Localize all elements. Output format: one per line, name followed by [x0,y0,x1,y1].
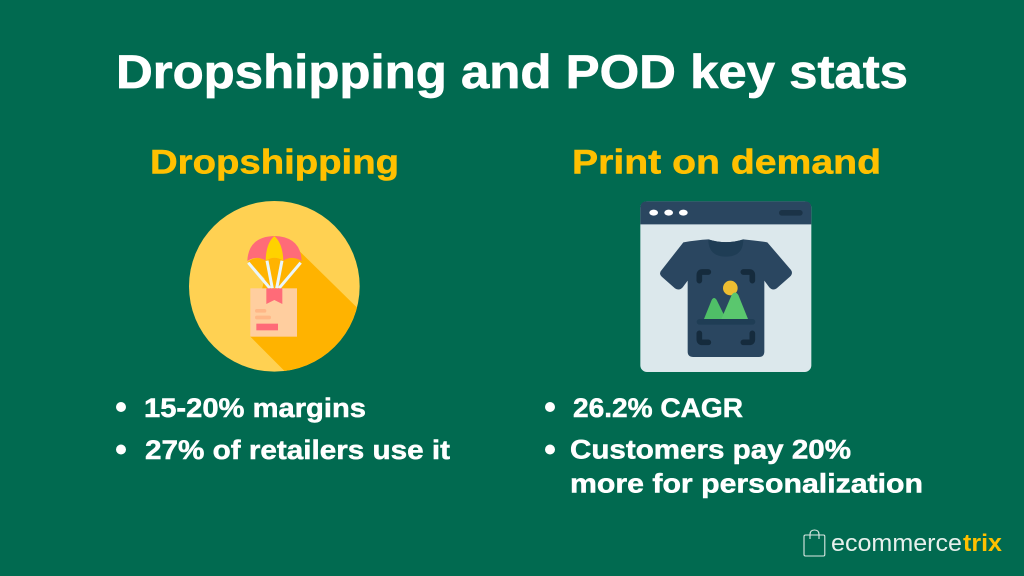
stat: personalization: Customers pay 20% [570,434,851,464]
logo wordmark: ecommerce: ecommerce [831,530,962,557]
stat: margins: 15-20% margins [144,393,366,423]
panel: print on demand [545,144,923,498]
heading: dropshipping: Dropshipping [150,144,399,182]
stat: retailers: 27% of retailers use it [145,435,450,465]
panel: dropshipping [116,144,450,465]
icon: parachute parcel [189,201,360,372]
icon: t-shirt in browser window [640,201,811,372]
logo wordmark: trix: trix [963,530,1003,557]
logo: ecommercetrix [804,530,1003,557]
stat: CAGR: 26.2% CAGR [573,393,743,423]
stat: personalization: more for personalization [570,468,923,498]
heading: print on demand: Print on demand [572,144,881,182]
title: Dropshipping and POD key stats [116,45,908,98]
stat: personalization [545,434,923,498]
icon: shopping bag [804,530,825,556]
